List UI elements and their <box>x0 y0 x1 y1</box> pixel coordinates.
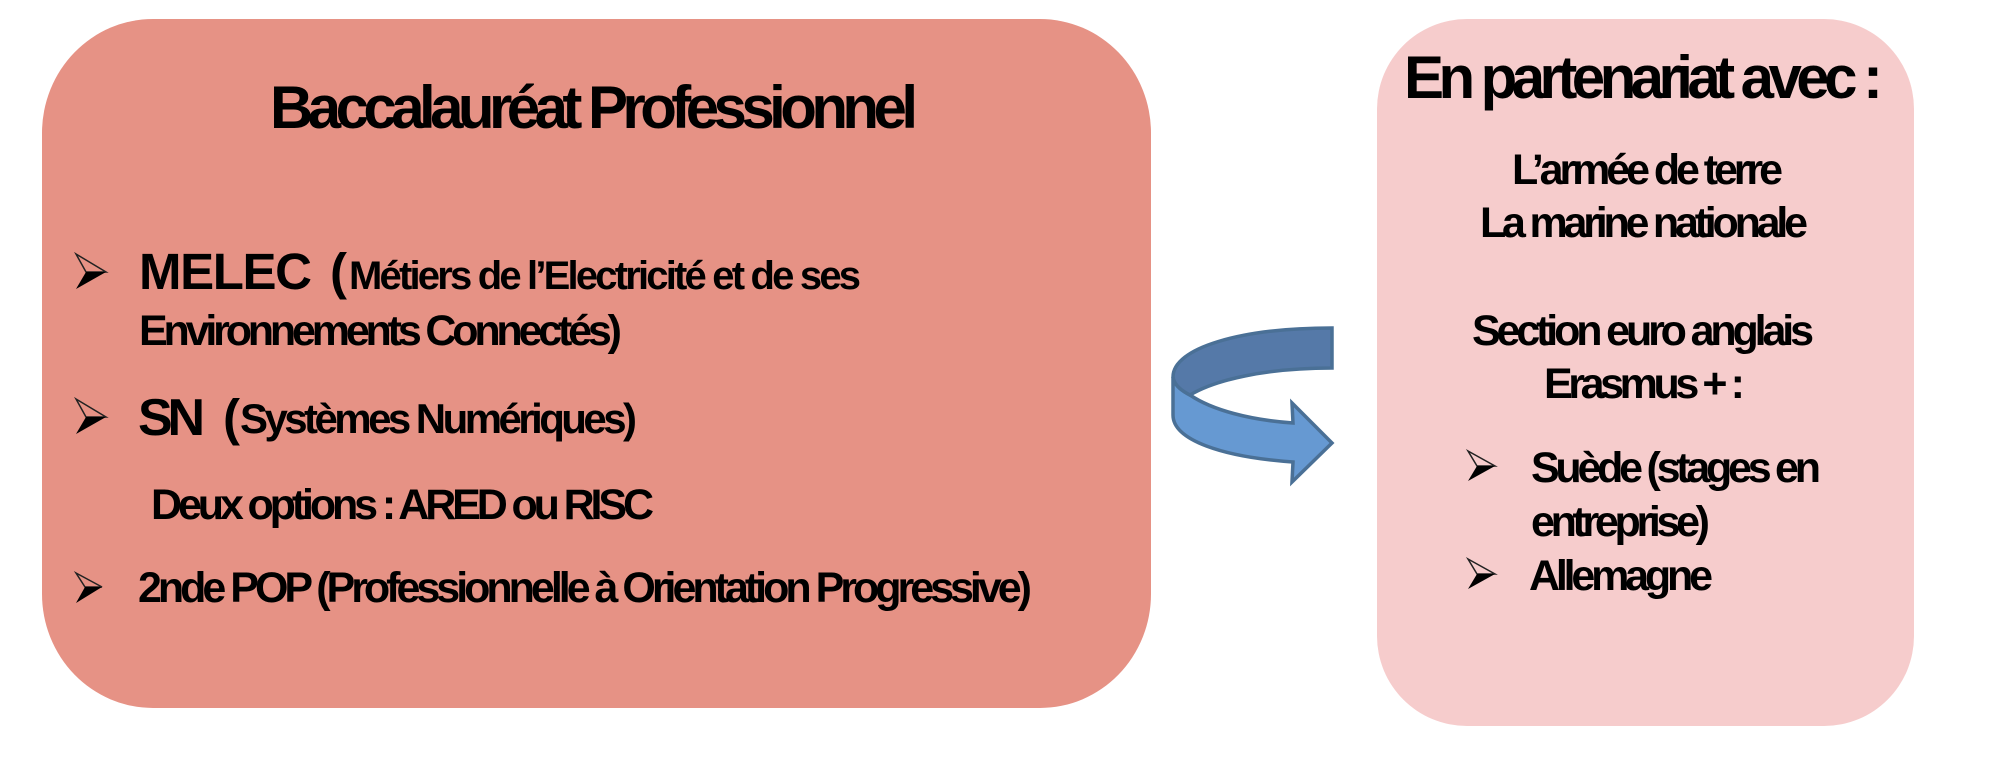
icon: bullet Allemagne <box>1468 559 1495 589</box>
list item: Suède <box>1531 444 1821 546</box>
text: options: Deux options : ARED ou RISC <box>151 481 654 529</box>
icon: bullet MELEC <box>76 254 106 289</box>
list item: MELEC <box>139 243 861 355</box>
list item: Suède: entreprise) <box>1531 498 1710 546</box>
panel background <box>42 19 1151 708</box>
list item: 2nde POP: 2nde POP (Professionnelle à Orientation Progressive) <box>138 564 1032 612</box>
text: Erasmus: Erasmus + : <box>1544 360 1745 408</box>
list item: SN: Systèmes Numériques) <box>240 395 637 442</box>
text: navy: La marine nationale <box>1480 199 1808 247</box>
list item: MELEC: Environnements Connectés) <box>139 307 622 355</box>
list item: Allemagne: Allemagne <box>1529 552 1713 600</box>
arrow lower band and head <box>1173 377 1332 482</box>
panel background <box>1377 19 1914 726</box>
arrow: curved arrow to partners <box>1173 328 1332 482</box>
heading: Baccalauréat Professionnel <box>270 74 918 141</box>
text: section euro: Section euro anglais <box>1472 307 1814 355</box>
arrow upper band <box>1173 328 1332 395</box>
list item: SN: ( <box>223 389 240 446</box>
heading: En partenariat avec : <box>1404 44 1883 111</box>
icon: bullet POP <box>76 573 102 603</box>
icon: bullet SN <box>76 399 106 434</box>
list item: MELEC: ( <box>330 243 347 300</box>
list item: SN: SN <box>138 389 205 447</box>
list item: SN <box>138 389 637 447</box>
icon: bullet Suède <box>1468 451 1495 481</box>
text: army: L’armée de terre <box>1512 146 1783 194</box>
list item: MELEC: MELEC <box>139 243 312 300</box>
list item: MELEC: Métiers de l’Electricité et de ses <box>349 254 861 298</box>
panel: En partenariat avec <box>1377 19 1914 726</box>
list item: Suède: Suède (stages en <box>1531 444 1821 492</box>
panel: Baccalauréat Professionnel <box>42 19 1151 708</box>
